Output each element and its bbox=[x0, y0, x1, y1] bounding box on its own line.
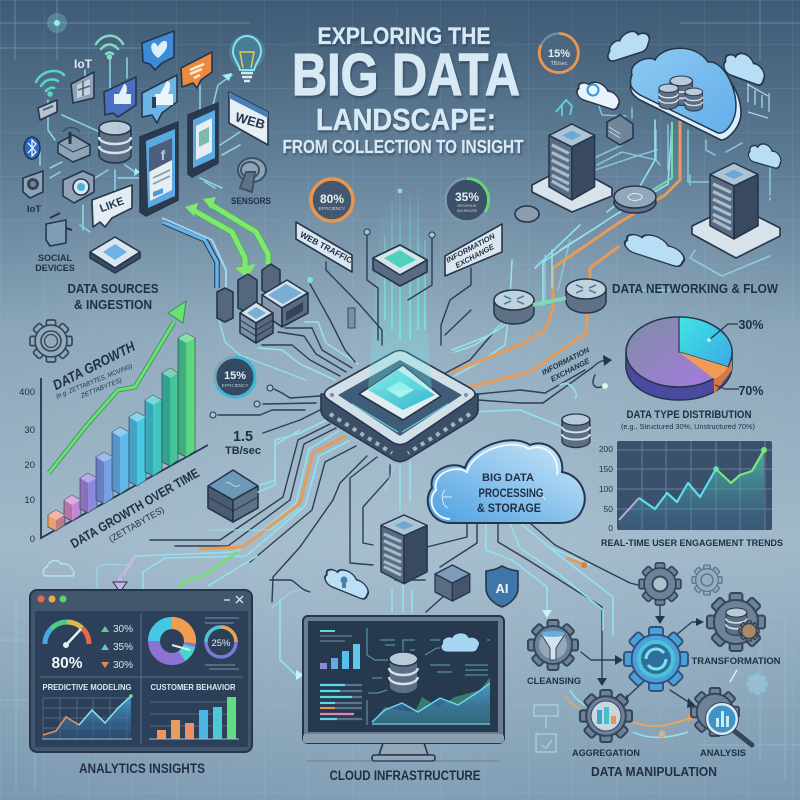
icon: small node bbox=[515, 206, 539, 222]
icon: right server tower on platform bbox=[692, 163, 780, 258]
growth arrow bbox=[49, 301, 186, 473]
label: aggregation: AGGREGATION bbox=[572, 748, 640, 759]
tag: web traffic: WEB TRAFFIC bbox=[298, 229, 354, 265]
icon: AI shield bbox=[486, 566, 518, 607]
icon: web window: WEB bbox=[234, 109, 267, 132]
stat: 1.5 TB per second: 1.5 bbox=[233, 428, 253, 445]
line chart: real-time engagement bbox=[599, 441, 783, 549]
chart title: DATA GROWTH OVER TIME bbox=[68, 465, 202, 551]
screen: bar chart bbox=[320, 631, 360, 669]
legend: percent rows: 30% bbox=[113, 624, 133, 635]
bar chart: data growth over time: 400 bbox=[19, 387, 35, 398]
big data processing cloud bbox=[428, 440, 585, 523]
panel: analytics insights bbox=[30, 590, 252, 752]
gauge: 80 percent efficiency: 80% bbox=[320, 192, 344, 206]
icon: small cube bbox=[435, 565, 470, 601]
label: social devices bbox=[35, 253, 75, 273]
section label: data sources and ingestion bbox=[68, 282, 158, 312]
line chart: real-time engagement: 200 bbox=[599, 444, 613, 454]
chart note: ZETTABYTES) bbox=[79, 377, 123, 400]
icon: process note bbox=[534, 705, 558, 752]
icon: cloud outline bbox=[43, 560, 74, 576]
line chart: real-time engagement: 150 bbox=[599, 464, 613, 474]
title: BIG DATA bbox=[292, 42, 520, 108]
gauge: 15 percent efficiency: EFFICIENCY bbox=[222, 383, 248, 388]
screen: database bbox=[389, 652, 418, 694]
pie chart: data type distribution: 70% bbox=[738, 384, 764, 398]
line chart: real-time engagement: 100 bbox=[599, 484, 613, 494]
line chart: predictive bbox=[42, 694, 133, 739]
icon: cloud small right bbox=[724, 46, 764, 87]
central processor chip bbox=[321, 350, 478, 462]
icon: heart bubble bbox=[142, 31, 174, 70]
bar chart: behavior bbox=[149, 697, 239, 739]
icon: left server tower on platform bbox=[532, 124, 612, 212]
icon: network box bbox=[373, 245, 427, 286]
gauge: 80 percent efficiency bbox=[310, 178, 354, 222]
label: information exchange: EXCHANGE bbox=[549, 356, 592, 384]
icon: transformation gear bbox=[707, 593, 765, 651]
icon: large phone: f bbox=[161, 147, 166, 163]
tag: web traffic bbox=[296, 222, 354, 272]
section label: networking: DATA NETWORKING & FLOW bbox=[612, 281, 779, 296]
pie note: (e.g., Structured 30%, Unstructured 70%) bbox=[621, 422, 755, 431]
icon: wifi left bbox=[36, 71, 64, 96]
icon: router hub centre bbox=[614, 186, 656, 213]
icon: AI shield: AI bbox=[496, 581, 508, 596]
icon: database bbox=[99, 121, 131, 163]
wires: chip to analytics panel bbox=[97, 424, 367, 620]
label: IoT top: IoT bbox=[74, 57, 93, 71]
label: predictive modeling: PREDICTIVE MODELING bbox=[42, 682, 132, 692]
section label: analytics insights: ANALYTICS INSIGHTS bbox=[79, 761, 205, 776]
icon: small server bbox=[607, 115, 633, 145]
screen: flow lines bbox=[367, 628, 490, 725]
pie title: DATA TYPE DISTRIBUTION bbox=[626, 409, 752, 421]
gauge: 80 percent efficiency: EFFICIENCY bbox=[319, 206, 345, 211]
icon: top gauge 15 percent: 15% bbox=[548, 48, 570, 60]
big data processing cloud: BIG DATA bbox=[482, 472, 534, 484]
wires: chip to network routers bbox=[440, 120, 680, 428]
icon: aggregation gear bbox=[580, 690, 632, 742]
label: sensors: SENSORS bbox=[231, 196, 271, 207]
legend: percent rows: 30% bbox=[113, 660, 133, 671]
title: FROM COLLECTION TO INSIGHT bbox=[282, 137, 524, 157]
ring: 25 percent bbox=[205, 618, 239, 669]
icon: lower cloud bbox=[625, 226, 684, 269]
icon: top gauge 15 percent: TB/sec bbox=[550, 61, 568, 67]
icon: like bubble: LIKE bbox=[98, 195, 126, 215]
tag: information exchange bbox=[444, 224, 502, 276]
title: LANDSCAPE: bbox=[316, 102, 496, 137]
icon: top gauge 15 percent bbox=[539, 33, 579, 73]
big data processing cloud: & STORAGE bbox=[477, 503, 541, 515]
panel: data manipulation bbox=[527, 563, 781, 779]
gauge: 35 percent revenue: INCREASE bbox=[457, 208, 478, 213]
icon: router right bbox=[566, 279, 606, 313]
gauge: 15 percent efficiency bbox=[215, 357, 255, 397]
icon: router hub bbox=[58, 128, 90, 162]
icon: light bulb bbox=[229, 34, 265, 81]
screen: cloud bbox=[441, 633, 480, 652]
bar chart: data growth over time: 30 bbox=[24, 425, 35, 436]
icon: like bubble bbox=[92, 185, 132, 227]
wires: chip to data sources bbox=[210, 316, 358, 486]
panel: data networking and flow bbox=[494, 25, 781, 324]
data beam bbox=[368, 180, 432, 390]
icon: square camera bbox=[23, 171, 43, 198]
line chart: real-time engagement: 0 bbox=[608, 523, 613, 533]
label: information exchange: INFORMATION bbox=[540, 345, 591, 377]
gauge: 35 percent revenue bbox=[445, 178, 489, 222]
icon: mini chart bbox=[747, 84, 769, 118]
stat: 1.5 TB per second: TB/sec bbox=[225, 445, 261, 457]
pie chart: data type distribution: 30% bbox=[738, 318, 764, 332]
line chart title: REAL-TIME USER ENGAGEMENT TRENDS bbox=[601, 538, 783, 549]
chart unit: (ZETTABYTES) bbox=[107, 505, 166, 544]
label: social devices: DEVICES bbox=[35, 263, 75, 273]
icon: database right bbox=[562, 414, 590, 448]
chart note: (e.g. ZETTABYTES, MOVING) bbox=[55, 363, 134, 400]
ring: 25 percent: 25% bbox=[211, 638, 231, 649]
wires: cloud to data manipulation bbox=[486, 523, 642, 686]
icon: camera bbox=[63, 171, 94, 203]
icon: thumbs tile blue bbox=[104, 77, 136, 117]
bar chart: data growth over time: 10 bbox=[24, 495, 35, 506]
icon: wifi top bbox=[96, 36, 123, 58]
icon: lock cloud bbox=[325, 562, 368, 601]
label: analysis: ANALYSIS bbox=[700, 748, 746, 759]
ingestion servers bbox=[217, 264, 308, 343]
icon: server tower centre bbox=[381, 515, 427, 584]
tag: information exchange: EXCHANGE bbox=[454, 242, 496, 270]
icon: orange bubble bbox=[181, 52, 212, 88]
icon: router left bbox=[494, 290, 534, 324]
legend: percent rows bbox=[101, 624, 133, 671]
line chart: real-time engagement: 50 bbox=[604, 504, 613, 514]
title: EXPLORING THE bbox=[318, 23, 490, 50]
bar chart: data growth over time: 20 bbox=[24, 460, 35, 471]
legend: percent rows: 35% bbox=[113, 642, 133, 653]
icon: bluetooth bbox=[24, 137, 40, 159]
panel: data sources and ingestion bbox=[23, 31, 271, 312]
title bbox=[282, 23, 524, 157]
label: cleansing: CLEANSING bbox=[527, 676, 581, 687]
wires: chip downward to tower and monitor bbox=[270, 457, 477, 680]
section label: cloud infrastructure: CLOUD INFRASTRUCTURE bbox=[330, 768, 480, 783]
label: IoT lower: IoT bbox=[27, 204, 41, 215]
panel: cloud infrastructure monitor bbox=[303, 616, 504, 761]
icon: analysis gear with magnifier bbox=[691, 688, 752, 745]
stat: 1.5 TB per second bbox=[225, 428, 261, 457]
gauge: 80 percent: 80% bbox=[51, 655, 83, 672]
ingestion arrows bbox=[162, 197, 268, 290]
icon: faint gear bbox=[692, 565, 722, 595]
section label: data sources and ingestion: DATA SOURCES bbox=[68, 282, 158, 296]
donut chart bbox=[150, 619, 194, 663]
gauge: 15 percent efficiency: 15% bbox=[224, 370, 246, 382]
section label: data sources and ingestion: & INGESTION bbox=[74, 298, 152, 312]
bar chart: data growth over time bbox=[19, 301, 208, 551]
label: social devices: SOCIAL bbox=[38, 253, 72, 263]
icon: small gear bbox=[747, 674, 767, 694]
icon: ingestion chip bbox=[90, 237, 140, 273]
icon: sensor bbox=[238, 158, 266, 192]
screen: area chart bbox=[372, 677, 490, 725]
gear icon bbox=[30, 320, 72, 362]
icon: small tag bbox=[38, 100, 57, 120]
gauge: 80 percent bbox=[45, 622, 89, 672]
icon: web window bbox=[229, 92, 268, 145]
icon: server box bbox=[208, 470, 258, 522]
icon: gear top bbox=[639, 563, 681, 605]
icon: large phone bbox=[140, 122, 178, 216]
icon: cloud lower right bbox=[749, 139, 781, 170]
pie chart: data type distribution bbox=[621, 317, 764, 431]
icon: watch device bbox=[46, 213, 72, 246]
icon: upload outline bbox=[556, 100, 572, 116]
connector: router link bbox=[533, 298, 566, 305]
icon: IoT tile bbox=[71, 72, 94, 103]
gauge: 35 percent revenue: REVENUE bbox=[457, 203, 477, 208]
label: customer behavior: CUSTOMER BEHAVIOR bbox=[150, 682, 236, 692]
icon: thumbs bubble light bbox=[142, 75, 177, 123]
icon: cloud refresh bbox=[577, 76, 619, 112]
bar chart: data growth over time: 0 bbox=[30, 534, 35, 545]
icon: database in cloud bbox=[659, 76, 703, 111]
section label: data manipulation: DATA MANIPULATION bbox=[591, 764, 717, 779]
wires: top centre box links bbox=[307, 229, 512, 362]
icon: cleansing gear with funnel bbox=[528, 620, 578, 670]
icon: cloud small top bbox=[608, 25, 649, 63]
icon: central gear bbox=[624, 627, 688, 691]
big data processing cloud: PROCESSING bbox=[478, 488, 544, 500]
icon: big cloud bbox=[630, 48, 741, 140]
label: transformation: TRANSFORMATION bbox=[692, 656, 781, 667]
icon: small phone bbox=[188, 103, 218, 177]
chart heading: data growth: DATA GROWTH bbox=[50, 338, 138, 393]
gauge: 35 percent revenue: 35% bbox=[455, 190, 479, 204]
screen: text rows bbox=[320, 685, 362, 719]
tag: information exchange: INFORMATION bbox=[444, 231, 497, 265]
